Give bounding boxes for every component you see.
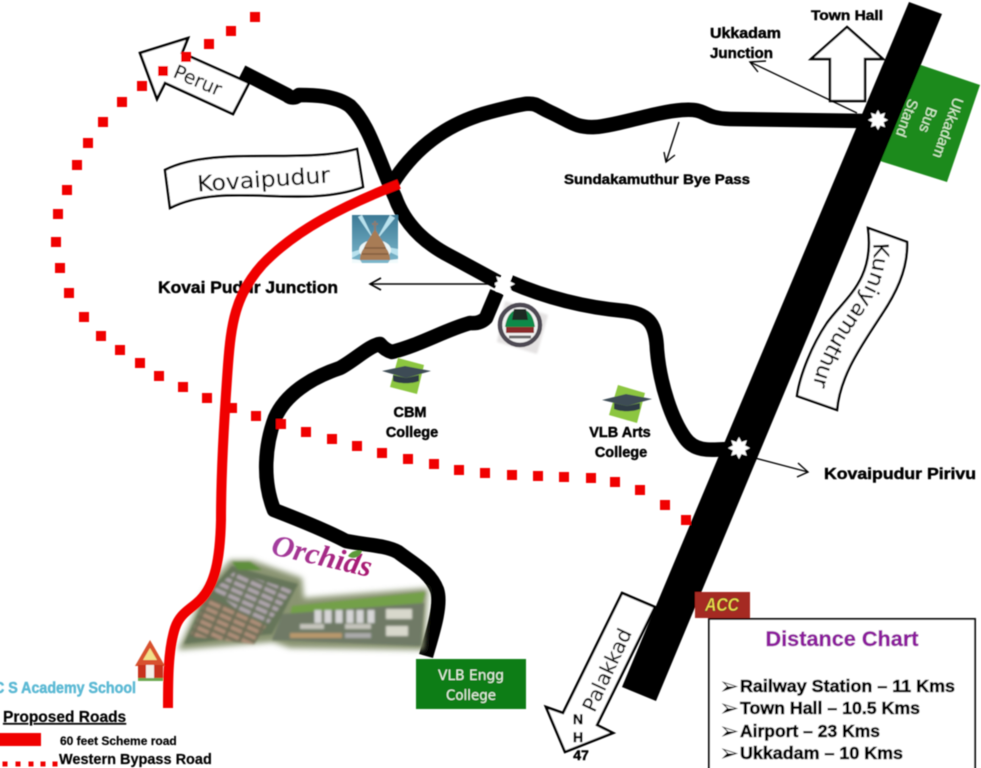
road: 60 feet scheme road (red) xyxy=(168,184,399,708)
label: VLB Engg College: College xyxy=(446,688,496,704)
arrow: Palakkad NH 47 xyxy=(546,593,655,763)
junction star: Kovai Pudur xyxy=(493,273,515,295)
legend: Proposed Roads: 60 feet Scheme road xyxy=(60,734,177,748)
road: Perur to Kovai Pudur junction xyxy=(242,72,498,282)
panel: Distance Chart: Distance Chart xyxy=(766,628,918,651)
banner: Kuniyamuthur: Kuniyamuthur xyxy=(813,244,890,390)
panel: Distance Chart: ➢ xyxy=(719,695,739,722)
label: VLB Engg College: VLB Engg xyxy=(438,668,504,684)
label: Ukkadam Junction: Junction xyxy=(710,46,773,62)
arrow: to Kovaipudur Pirivu xyxy=(755,458,808,477)
arrow: Perur xyxy=(140,38,249,114)
label: Sundakamuthur Bye Pass: Sundakamuthur Bye Pass xyxy=(564,171,750,187)
Orchids site plan xyxy=(178,560,428,650)
road: junction to Kovaipudur Pirivu xyxy=(510,282,728,450)
junction star: Ukkadam xyxy=(868,110,888,130)
arrow: Palakkad NH 47: N xyxy=(573,711,583,727)
label: VLB Arts College: VLB Arts xyxy=(589,425,651,441)
logo: Orchids: Orchids xyxy=(268,529,375,584)
label: VLB Engg College xyxy=(416,659,526,709)
logo: ACC xyxy=(695,592,750,618)
legend: Proposed Roads xyxy=(0,709,212,768)
legend: Proposed Roads: Western Bypass Road xyxy=(59,752,212,768)
banner: Kovaipudur: Kovaipudur xyxy=(196,163,332,198)
icon: school building xyxy=(135,640,165,681)
junction star: Kovaipudur Pirivu xyxy=(728,437,750,459)
label: Ukkadam Bus Stand xyxy=(877,63,980,182)
icon: VLB Arts College cap xyxy=(602,385,652,423)
banner: Kuniyamuthur xyxy=(795,226,910,412)
label: Ukkadam Bus Stand: Stand xyxy=(892,97,921,139)
arrow: to Ukkadam Junction xyxy=(750,61,857,113)
arrow: Palakkad NH 47: Palakkad xyxy=(577,625,637,715)
panel: Distance Chart xyxy=(709,619,975,768)
icon: Kovai Pudur logo xyxy=(497,301,548,354)
arrow: to Kovai Pudur Junction xyxy=(370,278,495,290)
logo: ACC: ACC xyxy=(704,595,740,615)
panel: Distance Chart: Railway Station – 11 Kms xyxy=(740,676,955,696)
arrow: Town Hall xyxy=(811,27,883,101)
label: Kovaipudur Pirivu: Kovaipudur Pirivu xyxy=(824,466,976,483)
label: CBM College: College xyxy=(386,425,438,441)
label: CBM College xyxy=(386,405,438,441)
label: Ukkadam Junction: Ukkadam xyxy=(710,26,781,42)
arrow: to Sundakamuthur Bye Pass xyxy=(664,122,679,162)
panel: Distance Chart: Airport – 23 Kms xyxy=(740,721,880,741)
road: junction to VLB Engg College xyxy=(266,292,497,656)
panel: Distance Chart: Town Hall – 10.5 Kms xyxy=(740,698,920,718)
main road: NH 47 xyxy=(622,2,942,701)
panel: Distance Chart: ➢ xyxy=(719,673,739,700)
banner: Kovaipudur xyxy=(165,149,363,208)
icon: CBM College cap xyxy=(382,358,431,394)
label: Ukkadam Bus Stand: Bus xyxy=(915,105,940,135)
arrow: Palakkad NH 47: 47 xyxy=(573,747,589,763)
label: Town Hall: Town Hall xyxy=(811,7,883,23)
label: Ukkadam Junction xyxy=(710,26,781,62)
panel: Distance Chart: Ukkadam – 10 Kms xyxy=(740,743,903,763)
panel: Distance Chart: ➢ xyxy=(719,740,739,767)
road: western bypass (red dotted) xyxy=(56,17,686,520)
arrow: Perur: Perur xyxy=(170,61,225,101)
label: Kovai Pudur Junction: Kovai Pudur Junction xyxy=(158,278,338,297)
arrow: Palakkad NH 47: H xyxy=(573,729,583,745)
label: Ukkadam Bus Stand: Ukkadam xyxy=(929,95,966,161)
icon: temple xyxy=(352,215,398,263)
legend: Proposed Roads: Proposed Roads xyxy=(3,709,126,726)
panel: Distance Chart: ➢ xyxy=(719,718,739,745)
label: CBM College: CBM xyxy=(393,405,427,421)
label: VLB Arts College: College xyxy=(595,445,647,461)
road: Sundakamuthur bye pass xyxy=(392,104,866,184)
label: VLB Arts College xyxy=(589,425,651,461)
